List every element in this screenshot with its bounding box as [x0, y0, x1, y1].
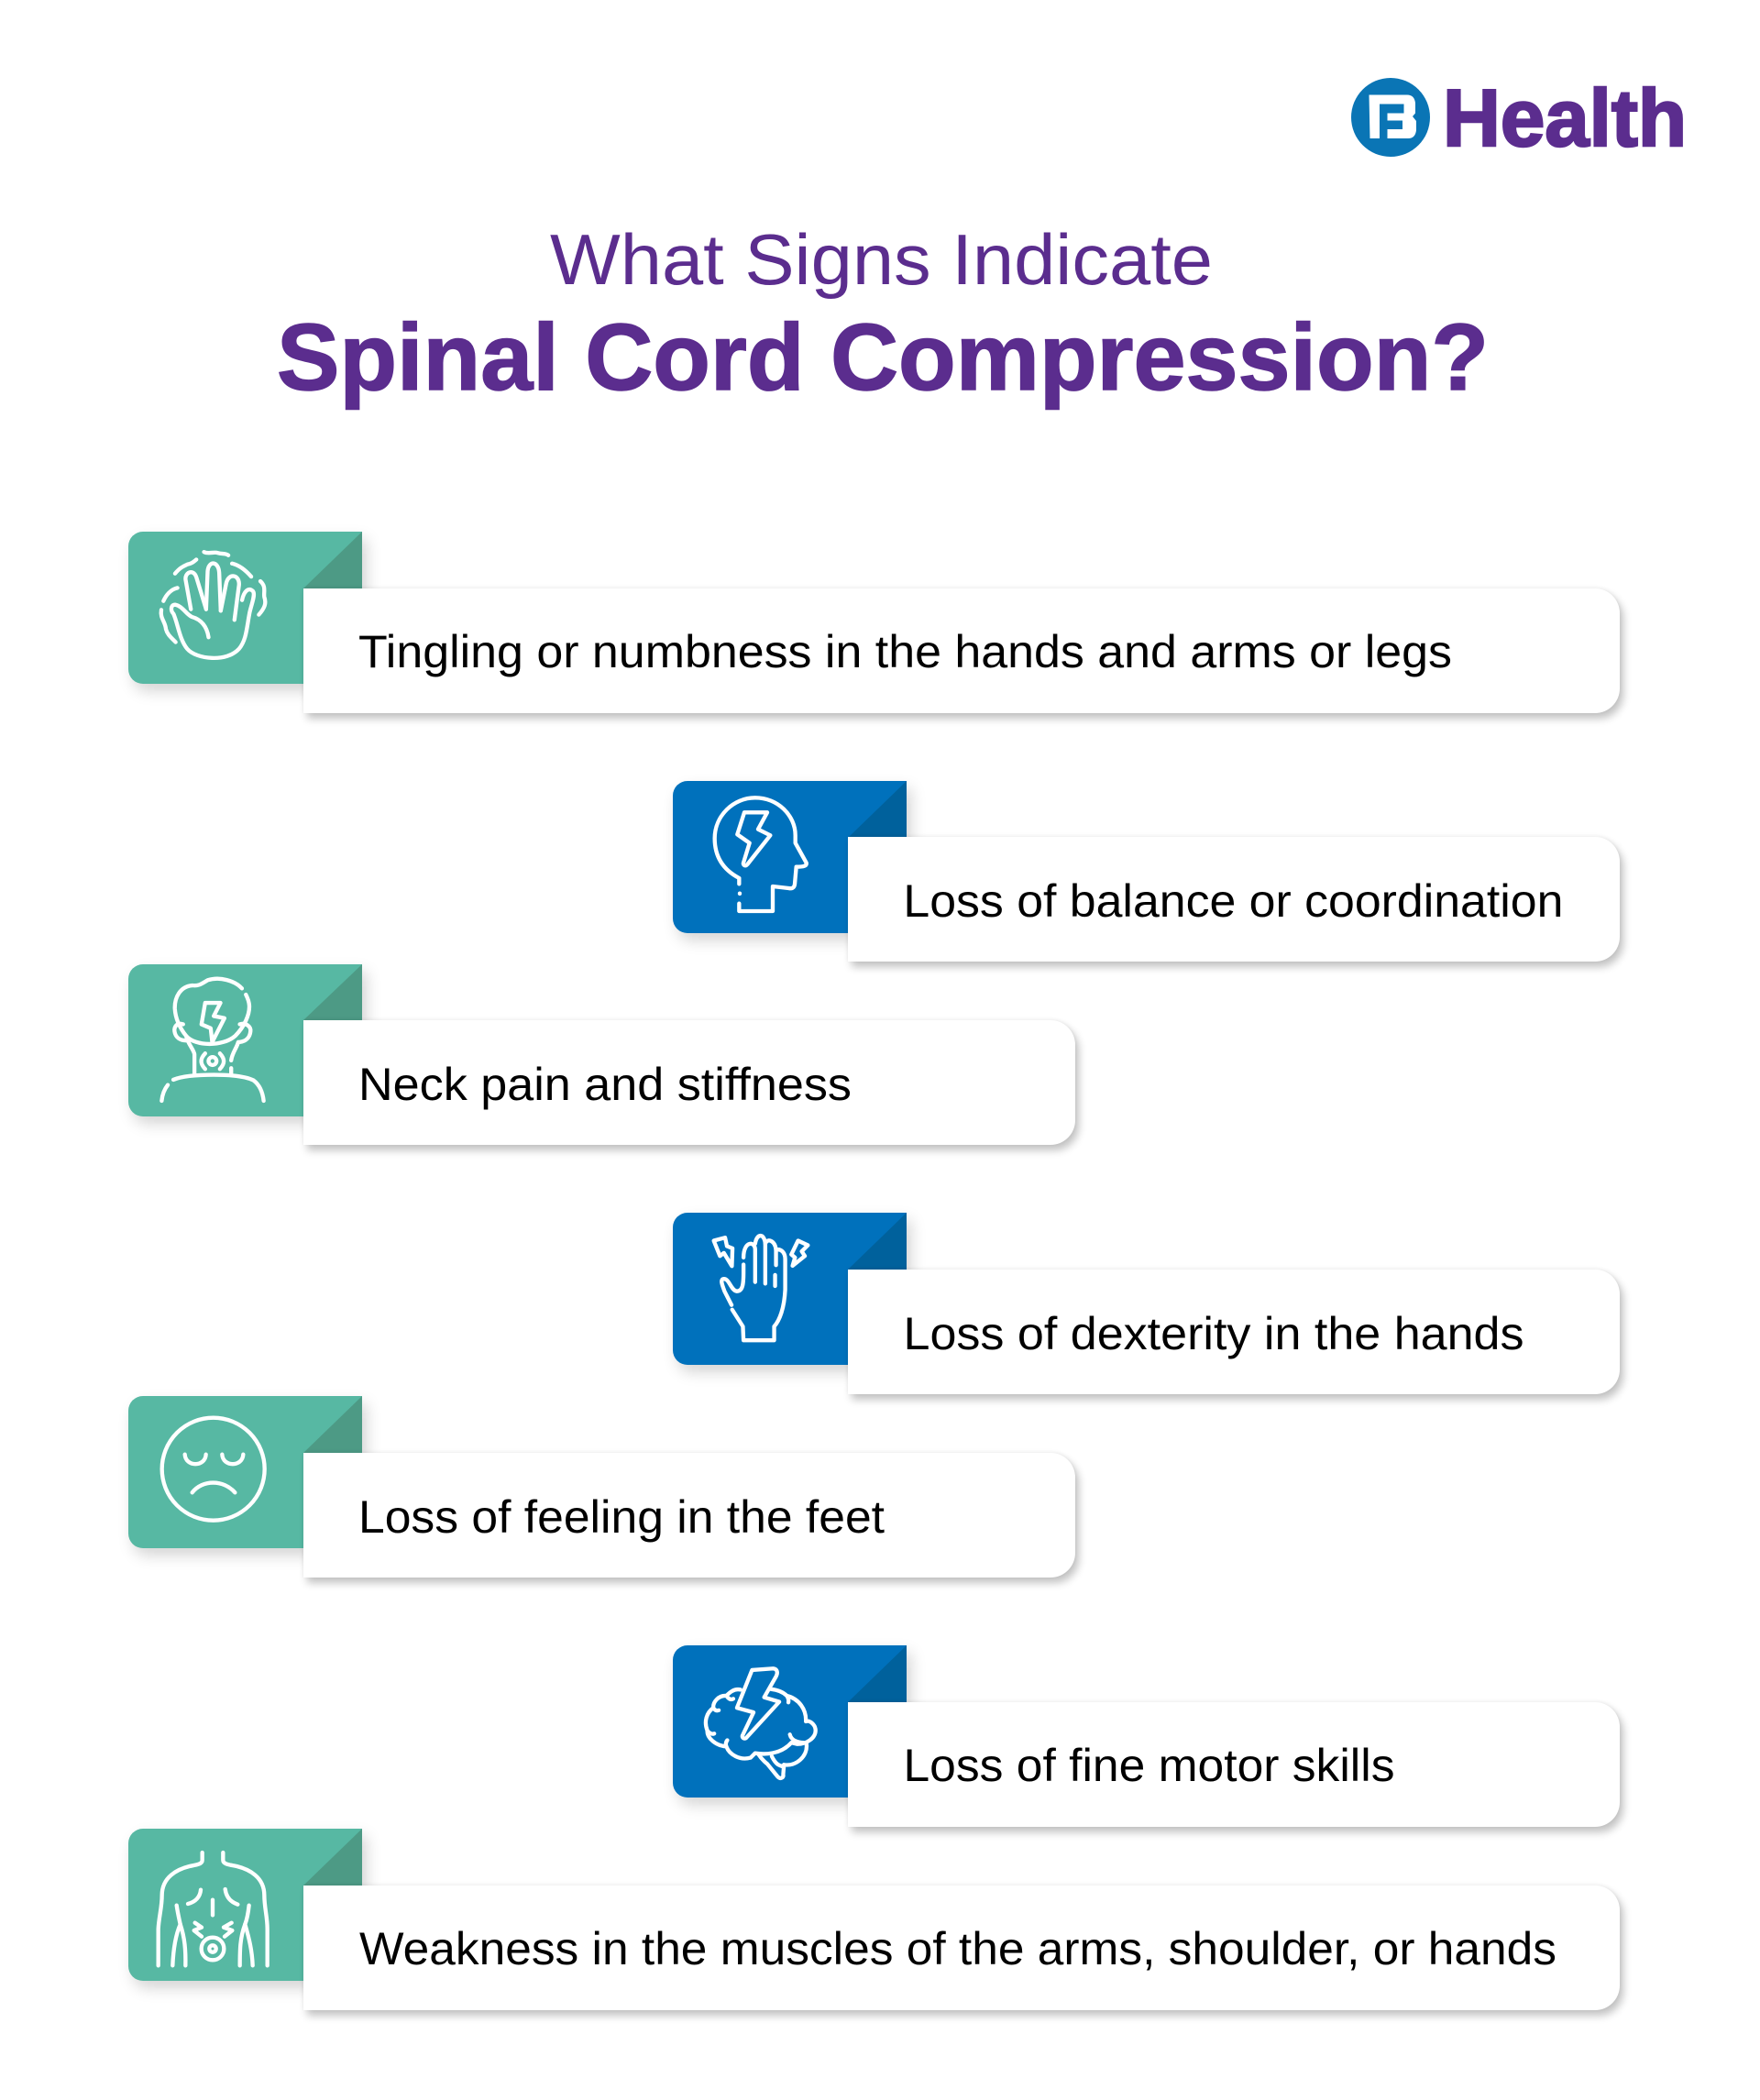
card: text: [303, 1453, 1075, 1578]
row: fine motor skills: [671, 1645, 1628, 1837]
icon: sad face: [160, 1415, 267, 1523]
row: loss of feeling: [126, 1396, 1084, 1588]
fold corner: [303, 532, 362, 588]
card: text: [303, 588, 1620, 713]
row: loss of balance: [671, 781, 1628, 972]
title line 2: Spinal Cord Compression?: [277, 304, 1489, 410]
card: text: [303, 1020, 1075, 1145]
fold corner: [848, 1645, 907, 1702]
tile: blue: [673, 781, 907, 933]
logo mark: blue circle with monogram: [1351, 78, 1430, 157]
icon: shaking hand: [160, 550, 268, 660]
card: text: Neck pain and stiffness: [358, 1059, 852, 1110]
tile: teal: [128, 1829, 362, 1981]
title: [277, 219, 1489, 411]
fold corner: [849, 781, 907, 837]
icon: neck with bolt: [160, 977, 266, 1104]
icon: head with bolt: [713, 796, 808, 913]
card: text: Loss of fine motor skills: [904, 1740, 1395, 1791]
tile: teal: [128, 1396, 362, 1548]
row: loss of dexterity: [671, 1213, 1628, 1404]
tile: blue: [673, 1645, 907, 1798]
card: text: [848, 837, 1620, 962]
card: text: Weakness in the muscles of the arms, shoulder, or hands: [359, 1923, 1556, 1974]
logo wordmark: Health: [1443, 72, 1687, 163]
card: text: Loss of balance or coordination: [903, 875, 1563, 927]
fold corner: [303, 964, 362, 1020]
fold corner: [848, 1213, 907, 1270]
tile: blue: [673, 1213, 907, 1365]
fold corner: [303, 1829, 362, 1886]
card: text: [848, 1702, 1620, 1827]
title line 1: What Signs Indicate: [550, 219, 1213, 300]
card: text: Tingling or numbness in the hands and arms or legs: [358, 626, 1452, 677]
tile: teal: [128, 964, 362, 1116]
logo: Health brand: [1351, 72, 1687, 163]
row: tingling or numbness: [126, 532, 1628, 722]
card: text: Loss of dexterity in the hands: [904, 1308, 1524, 1359]
icon: hand with bolts: [711, 1234, 810, 1342]
card: text: Loss of feeling in the feet: [358, 1491, 885, 1543]
row: weakness in muscles: [126, 1829, 1628, 2020]
row: neck pain: [126, 964, 1084, 1155]
tile: teal: [128, 532, 362, 684]
fold corner: [303, 1396, 362, 1453]
card: text: [848, 1270, 1620, 1394]
icon: brain with bolt: [704, 1666, 818, 1780]
card: text: [303, 1886, 1620, 2010]
icon: torso with pain target: [156, 1850, 270, 1967]
